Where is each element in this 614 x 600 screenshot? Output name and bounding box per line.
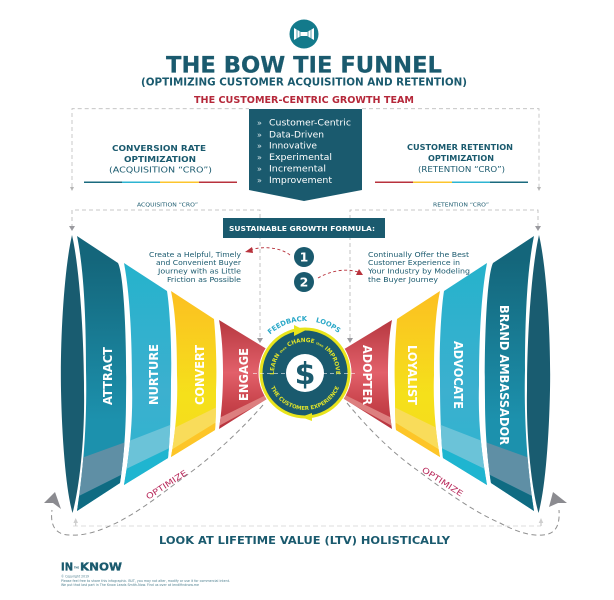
badge: formula 2 <box>294 272 314 292</box>
panel: team traits: Improvement <box>269 176 333 186</box>
text: formula 1: Friction as Possible <box>167 276 241 284</box>
dashed team bracket <box>72 109 539 187</box>
dollar symbol: $ <box>295 357 315 392</box>
text: formula 2 <box>367 251 470 284</box>
stage labels: CONVERT <box>193 344 207 405</box>
curved text: learn change improve: LEARN then CHANGE then IMPROVE <box>270 338 340 374</box>
panel: team traits: » <box>257 176 262 185</box>
panel: team traits: Data-Driven <box>269 130 324 140</box>
stage labels: NURTURE <box>147 344 161 405</box>
arrow: formula 2 to text <box>318 269 363 278</box>
panel: team traits: » <box>257 119 262 128</box>
panel: team traits: Experimental <box>269 153 332 163</box>
label: acquisition cro: ACQUISITION “CRO” <box>137 203 198 209</box>
panel: team traits: Innovative <box>269 142 317 152</box>
stage: nurture <box>124 263 172 485</box>
stage labels: ADOPTER <box>360 345 374 405</box>
panel: team traits: » <box>257 165 262 174</box>
text: formula 1: Create a Helpful, Timely <box>149 251 241 259</box>
label: optimize right: OPTIMIZE <box>420 465 465 498</box>
heading: sustainable growth formula: SUSTAINABLE GROWTH FORMULA: <box>229 224 375 233</box>
footer: copyright: Please feel free to share this infographic. BUT, you may not alter, modify or use it for commercial intent. <box>61 579 230 583</box>
text: formula 2: Your Industry by Modeling <box>367 268 470 276</box>
dashed acquisition bracket <box>72 210 538 338</box>
badge: formula 1 <box>294 247 314 267</box>
title: THE BOW TIE FUNNEL <box>166 53 442 78</box>
text: formula 1 <box>149 251 241 284</box>
panel: conversion rate optimization <box>84 143 237 182</box>
panel: customer retention optimization: (RETENTION “CRO”) <box>418 165 505 174</box>
panel: team traits: Incremental <box>269 165 326 175</box>
curved text: loops: LOOPS <box>316 317 341 332</box>
logo: in the know: KNOW <box>80 560 122 574</box>
text: formula 2: Customer Experience in <box>368 259 460 267</box>
footer: copyright: © Copyright 2019 <box>61 574 89 578</box>
panel: team traits: » <box>257 153 262 162</box>
arrow: formula 1 to text <box>245 247 290 255</box>
heading: lifetime value: LOOK AT LIFETIME VALUE (LTV) HOLISTICALLY <box>159 534 451 547</box>
stage labels: ATTRACT <box>101 346 115 405</box>
logo: in the know: THE <box>74 565 79 569</box>
arrow: team bracket left <box>70 187 74 191</box>
arrow: optimize loop right <box>347 403 567 535</box>
stage labels <box>101 305 511 445</box>
stage: engage <box>219 320 267 429</box>
text: formula 1: and Convenient Buyer <box>156 259 241 267</box>
funnel: acquisition side <box>61 230 273 520</box>
left lens <box>61 235 84 513</box>
right lens <box>527 235 550 513</box>
arrow: lifetime left up <box>73 518 78 526</box>
stage labels: ADVOCATE <box>451 341 465 409</box>
arrows: bracket heads <box>69 226 541 343</box>
panel: customer retention optimization: OPTIMIZATION <box>428 154 494 163</box>
badge: formula 2: 2 <box>300 274 308 290</box>
ltv baseline dashes <box>73 525 541 527</box>
panel: customer retention optimization <box>375 143 528 182</box>
text: formula 2: Continually Offer the Best <box>368 251 469 259</box>
stage: adopter <box>344 320 392 429</box>
arrow: lifetime right up <box>539 518 543 526</box>
funnel: retention side <box>338 230 550 520</box>
label: retention cro: RETENTION “CRO” <box>433 203 489 209</box>
arrow: bottom loop <box>301 413 312 421</box>
arrow: top loop <box>294 325 305 336</box>
panel: team traits: Customer-Centric <box>269 119 351 129</box>
panel: conversion rate optimization: CONVERSION RATE <box>112 143 206 153</box>
stage labels: BRAND AMBASSADOR <box>497 305 511 445</box>
heading: growth team: THE CUSTOMER-CENTRIC GROWTH TEAM <box>194 95 414 106</box>
panel: team traits: » <box>257 142 262 151</box>
panel: conversion rate optimization: OPTIMIZATION <box>124 154 196 164</box>
badge: formula 1: 1 <box>300 250 308 264</box>
arrow: optimize loop left <box>44 405 263 535</box>
footer: copyright <box>61 574 230 587</box>
text: formula 2: the Buyer Journey <box>368 276 438 284</box>
stage: loyalist <box>394 291 440 457</box>
heading: sustainable growth formula <box>223 218 385 238</box>
stage labels: LOYALIST <box>405 345 419 406</box>
logo: in the know <box>61 560 122 574</box>
label: optimize left: OPTIMIZE <box>144 468 189 501</box>
curved text: feedback: FEEDBACK <box>267 316 308 334</box>
stage: advocate <box>440 263 487 485</box>
stage: brand ambassador <box>484 236 534 511</box>
subtitle: (OPTIMIZING CUSTOMER ACQUISITION AND RETENTION) <box>141 76 467 89</box>
logo: in the know: IN <box>61 560 73 574</box>
footer: copyright: We put that last part in The Know Leads Smith-Now. Find us over at lendlfindnow.me <box>61 583 199 587</box>
stage: attract <box>77 236 126 511</box>
center badge: feedback loops <box>253 316 355 421</box>
panel: conversion rate optimization: (ACQUISITION “CRO”) <box>109 166 212 175</box>
panel: customer retention optimization: CUSTOMER RETENTION <box>407 143 513 152</box>
icon: bow tie logo <box>290 20 318 48</box>
panel: team traits: » <box>257 130 262 139</box>
stage labels: ENGAGE <box>237 348 251 401</box>
curved text: customer experience: THE CUSTOMER EXPERIENCE <box>271 386 339 410</box>
text: formula 1: Journey with as Little <box>157 268 241 276</box>
arrow: team bracket right <box>537 187 541 191</box>
panel: team traits <box>249 109 362 201</box>
stage: convert <box>171 291 216 457</box>
